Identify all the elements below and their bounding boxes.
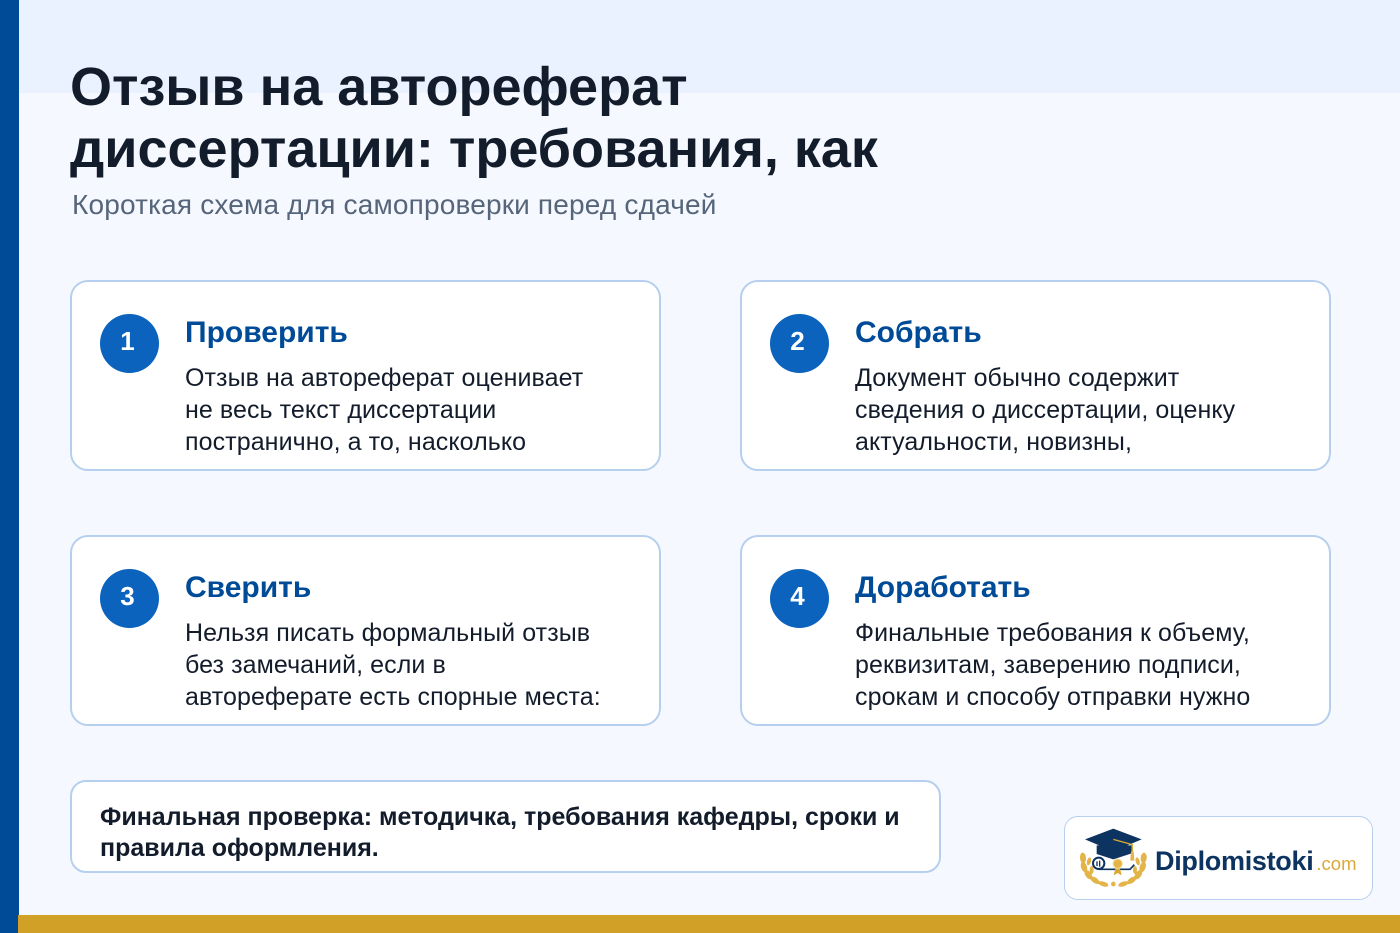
- card 2 heading: Собрать: [855, 316, 982, 349]
- card 1: [70, 280, 661, 471]
- title: Отзыв на автореферат: [70, 57, 688, 117]
- card 4 heading: Доработать: [855, 571, 1031, 604]
- card 4 text: реквизитам, заверению подписи,: [855, 651, 1241, 679]
- number 1: [100, 314, 159, 373]
- card 3 text: Нельзя писать формальный отзыв: [185, 619, 590, 647]
- bottom gold bar: [18, 915, 1400, 933]
- card 1 heading: Проверить: [185, 316, 348, 349]
- card 1 text: [185, 364, 583, 456]
- card 1 text: не весь текст диссертации: [185, 396, 496, 424]
- callout text: [100, 803, 900, 862]
- card 4 text: Финальные требования к объему,: [855, 619, 1250, 647]
- callout text: Финальная проверка: методичка, требования кафедры, сроки и: [100, 803, 900, 831]
- card 1 text: Отзыв на автореферат оценивает: [185, 364, 583, 392]
- card 3 text: автореферате есть спорные места:: [185, 683, 601, 711]
- card 1 text: постранично, а то, насколько: [185, 428, 526, 456]
- callout text: правила оформления.: [100, 834, 379, 862]
- number 2: 2: [790, 326, 805, 356]
- card 3 text: [185, 619, 601, 711]
- logo wordmark: Diplomistoki.com: [1155, 846, 1357, 876]
- number 3: 3: [120, 581, 135, 611]
- final check callout: [70, 780, 941, 873]
- number 3: [100, 569, 159, 628]
- subtitle: Короткая схема для самопроверки перед сдачей: [72, 189, 717, 220]
- card 3 heading: Сверить: [185, 571, 311, 604]
- card 2 text: [855, 364, 1235, 456]
- card 2 text: Документ обычно содержит: [855, 364, 1179, 392]
- number 2: [770, 314, 829, 373]
- card 4: [740, 535, 1331, 726]
- left accent bar: [0, 0, 19, 933]
- title: диссертации: требования, как: [70, 119, 878, 179]
- card 4 text: [855, 619, 1250, 711]
- card 4 text: срокам и способу отправки нужно: [855, 683, 1250, 711]
- number 4: 4: [790, 581, 805, 611]
- icon: graduation cap with laurel: [1080, 828, 1147, 887]
- top band: [18, 0, 1400, 93]
- number 1: 1: [120, 326, 135, 356]
- card 3 text: без замечаний, если в: [185, 651, 446, 679]
- card 2: [740, 280, 1331, 471]
- card 2 text: сведения о диссертации, оценку: [855, 396, 1235, 424]
- number 4: [770, 569, 829, 628]
- card 3: [70, 535, 661, 726]
- title: [70, 57, 878, 179]
- logo card: [1064, 816, 1373, 900]
- card 2 text: актуальности, новизны,: [855, 428, 1132, 456]
